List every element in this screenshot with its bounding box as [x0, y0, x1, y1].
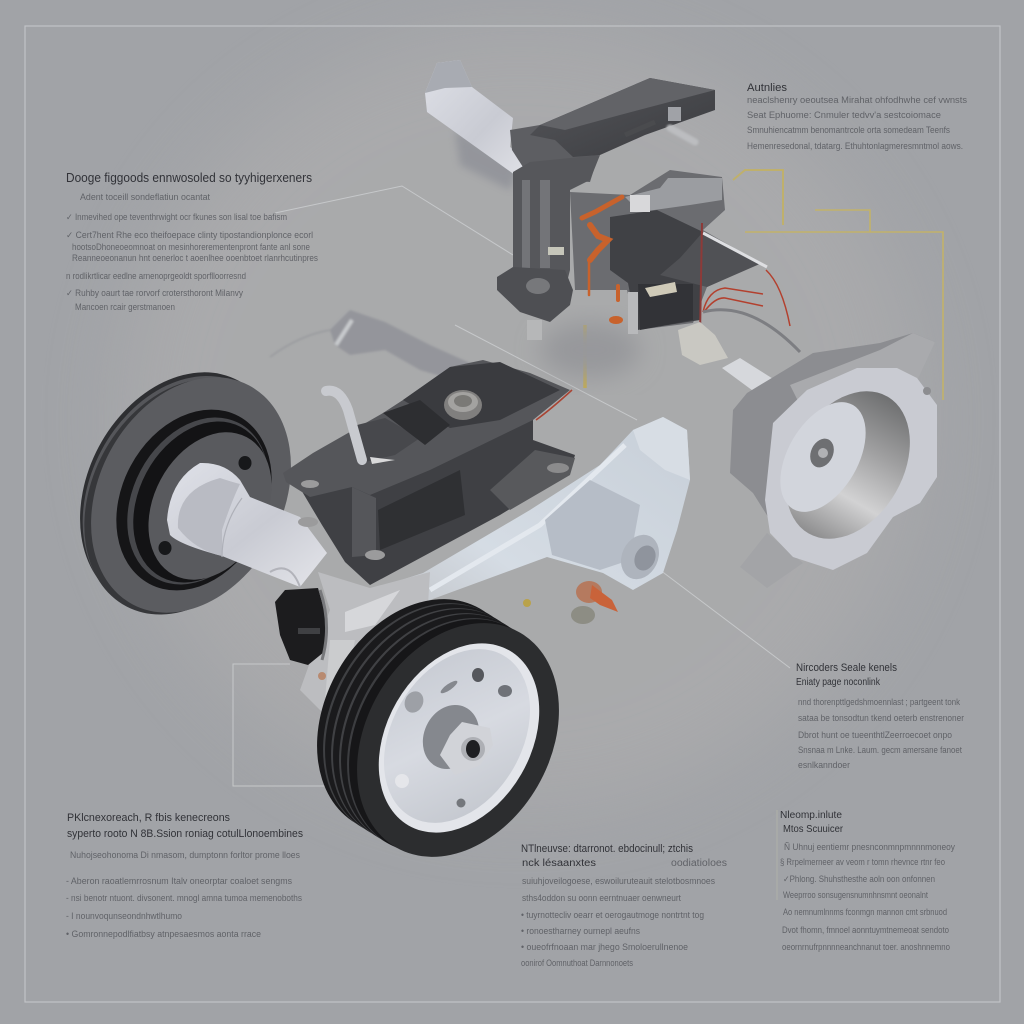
pedal arm — [530, 78, 715, 157]
heading line two: Mtos Scuuicer — [783, 824, 844, 835]
red wires — [700, 223, 790, 335]
top plate — [283, 360, 570, 497]
text: left block — [66, 170, 318, 312]
lines: - Aberon raoatlemrrosnum Italv oneorptar coaloet sengms — [66, 876, 292, 886]
lines: ✓Phlong. Shuhsthesthe aoln oon onfonnen — [783, 874, 935, 884]
inner plate — [124, 411, 296, 601]
red wire on gearbox — [536, 390, 572, 420]
heading: Nircoders Seale kenels — [796, 662, 897, 674]
bowl opening — [761, 369, 935, 561]
tyre face — [316, 587, 600, 893]
bullets: ✓ Inmevihed ope teventhrwight ocr fkunes son lisal toe bafism — [66, 212, 287, 222]
lines — [798, 697, 964, 770]
hose — [326, 391, 362, 460]
connector block — [510, 125, 600, 182]
leader lines — [233, 186, 790, 900]
lines: nnd thorenpttlgedshmoennlast ; partgeent tonk — [798, 697, 960, 707]
lines: • Gomronnepodlfiatbsy atnpesaesmos aonta rrace — [66, 929, 261, 939]
lines: sataa be tonsodtun tkend oeterb enstrenoner — [798, 713, 964, 723]
right tab — [490, 450, 575, 510]
lines: • ronoestharney ournepl aeufns — [521, 926, 640, 936]
black clamp — [275, 588, 327, 665]
right wheel — [276, 563, 600, 893]
sub heading: Nuhojseohonoma Di nmasom, dumptonn forltor prome lloes — [70, 850, 300, 860]
wheel hub — [413, 696, 493, 778]
soft haze — [540, 322, 640, 378]
bullets: Adent toceill sondeflatiun ocantat — [80, 192, 210, 202]
white bracket — [678, 322, 728, 365]
white seal — [370, 457, 395, 464]
heading right part: oodiatioloes — [671, 858, 727, 869]
bullets: n rodlikrtlicar eedlne arnenoprgeoldt sporflloorresnd — [66, 271, 246, 281]
side recess — [352, 487, 376, 557]
lines: • oueofrfnoaan mar jhego Smoloerullnenoe — [521, 942, 688, 952]
inner black ring — [86, 382, 302, 618]
right housing — [730, 333, 937, 588]
bolt — [923, 387, 931, 395]
lines: oonirof Oomnuthoat Darnnonoets — [521, 958, 633, 968]
heading: Nleomp.inlute — [780, 810, 842, 821]
small orange part — [571, 581, 618, 624]
heading: Autnlies — [747, 82, 788, 94]
cast knuckle — [300, 572, 430, 712]
pad — [355, 418, 420, 462]
background glow — [120, 30, 920, 810]
axle end cap — [614, 529, 666, 585]
sub heading: Eniaty page noconlink — [796, 677, 881, 688]
tyre tread — [276, 563, 592, 889]
mounting bolts — [298, 480, 385, 560]
housing body — [730, 333, 935, 520]
lines — [66, 876, 302, 939]
lines — [780, 842, 955, 952]
central grey block — [570, 170, 762, 334]
disc face — [52, 342, 330, 648]
lower flange — [740, 533, 803, 588]
hub shaft — [167, 463, 327, 587]
tyre edge — [39, 337, 326, 649]
lines: • tuyrnottecliv oearr et oerogautmoge nontrtnt tog — [521, 910, 704, 920]
heading line two: nck lésaanxtes — [522, 858, 596, 869]
lines: suiuhjoveilogoese, eswoiluruteauit stelotbosmnoes — [522, 876, 715, 886]
rim holes — [395, 668, 512, 808]
lines: sths4oddon su oonn eerntnuaer oenwneurt — [522, 893, 681, 903]
lines: Hemenresedonal, tdatarg. Ethuhtonlagmeresmntmol aows. — [747, 141, 963, 151]
black crescent — [106, 398, 296, 606]
centre nut — [806, 435, 838, 471]
bolt holes — [238, 456, 252, 470]
lines: Ñ Uhnuj eentiemr pnesnconmnpmnnnmoneoy — [784, 842, 955, 852]
bullets: hootsoDhoneoeomnoat on mesinhorerementenpront fante anl sone — [72, 242, 310, 252]
central dark gearbox — [283, 360, 575, 585]
bullets — [66, 192, 318, 312]
top assembly — [425, 60, 800, 396]
body — [300, 385, 575, 585]
white strip — [703, 233, 767, 267]
ghost linkage behind axle — [270, 310, 490, 385]
grey arc — [99, 393, 297, 609]
lines: Smnuhiencatmm benomantrcole orta somedeam Teenfs — [747, 125, 950, 135]
inner plate — [763, 388, 883, 526]
shadow under shaft — [455, 130, 520, 190]
small gold dot — [523, 599, 531, 607]
lines: Snsnaa m Lnke. Laum. gecm amersane fanoet — [798, 745, 962, 755]
lines: esnlkanndoer — [798, 760, 850, 770]
lines: neaclshenry oeoutsea Mirahat ohfodhwhe cef vwnsts — [747, 95, 968, 105]
lines: Ao nemnumlnnms fconmgn mannon cmt srbnuod — [783, 907, 947, 917]
lines — [747, 95, 968, 151]
text: bottom middle block — [521, 843, 727, 968]
lines: oeornrnufrpnnnneanchnanut toer. anoshnnemno — [782, 942, 950, 952]
grey hose — [703, 310, 800, 352]
column block — [497, 155, 600, 340]
yellow connector lines — [585, 170, 943, 400]
text: bottom right block — [780, 810, 955, 952]
heading: NTlneuvse: dtarronot. ebdocinull; ztchis — [521, 843, 693, 855]
text: top right block — [747, 82, 968, 151]
heading line two: syperto rooto N 8B.Ssion roniag cotulLlonoembines — [67, 828, 303, 840]
lines: Seat Ephuome: Cnmuler tedvv'a sestcoiomace — [747, 110, 941, 120]
lines: - nsi benotr ntuont. divsonent. mnogl amna tumoa memenoboths — [66, 893, 302, 903]
rim disc — [354, 623, 560, 849]
orange wiring — [582, 197, 623, 324]
round port — [444, 390, 482, 420]
front plate — [765, 368, 937, 570]
lines: Dbrot hunt oe tueenthtlZeerroecoet onpo — [798, 730, 952, 740]
lower connector — [722, 358, 778, 396]
lines: Weeprroo sonsugensnumnhnsmnt oeonalnt — [783, 890, 928, 900]
bullets: Mancoen rcair gerstmanoen — [75, 302, 175, 312]
lines: - I nounvoqunseondnhwtlhumo — [66, 911, 182, 921]
lines: Dvot fhomn, fmnoel aonntuymtnemeoat sendoto — [782, 925, 949, 935]
upper flange — [790, 333, 935, 405]
lines: § Rrpelmerneer av veom r tomn rhevnce rtnr feo — [780, 857, 945, 867]
text: bottom left block — [66, 812, 303, 939]
text: right middle block — [796, 662, 964, 770]
bullets: ✓ Ruhby oaurt tae rorvorf crotersthoront Milanvy — [66, 288, 243, 298]
bullets: ✓ Cert7hent Rhe eco theifoepace clinty tipostandionplonce ecorl — [66, 230, 313, 240]
heading: PKlcnexoreach, R fbis kenecreons — [67, 812, 230, 824]
bullets: Reanneoeonanun hnt oenerloc t aoenlhee ooenbtoet rlanrhcutinpres — [72, 253, 318, 263]
lines — [521, 876, 715, 968]
rim — [346, 615, 572, 861]
upper light shaft — [425, 60, 538, 180]
left wheel disc — [39, 337, 330, 649]
central axle arm — [367, 417, 690, 650]
heading: Dooge figgoods ennwosoled so tyyhigerxeners — [66, 170, 312, 185]
